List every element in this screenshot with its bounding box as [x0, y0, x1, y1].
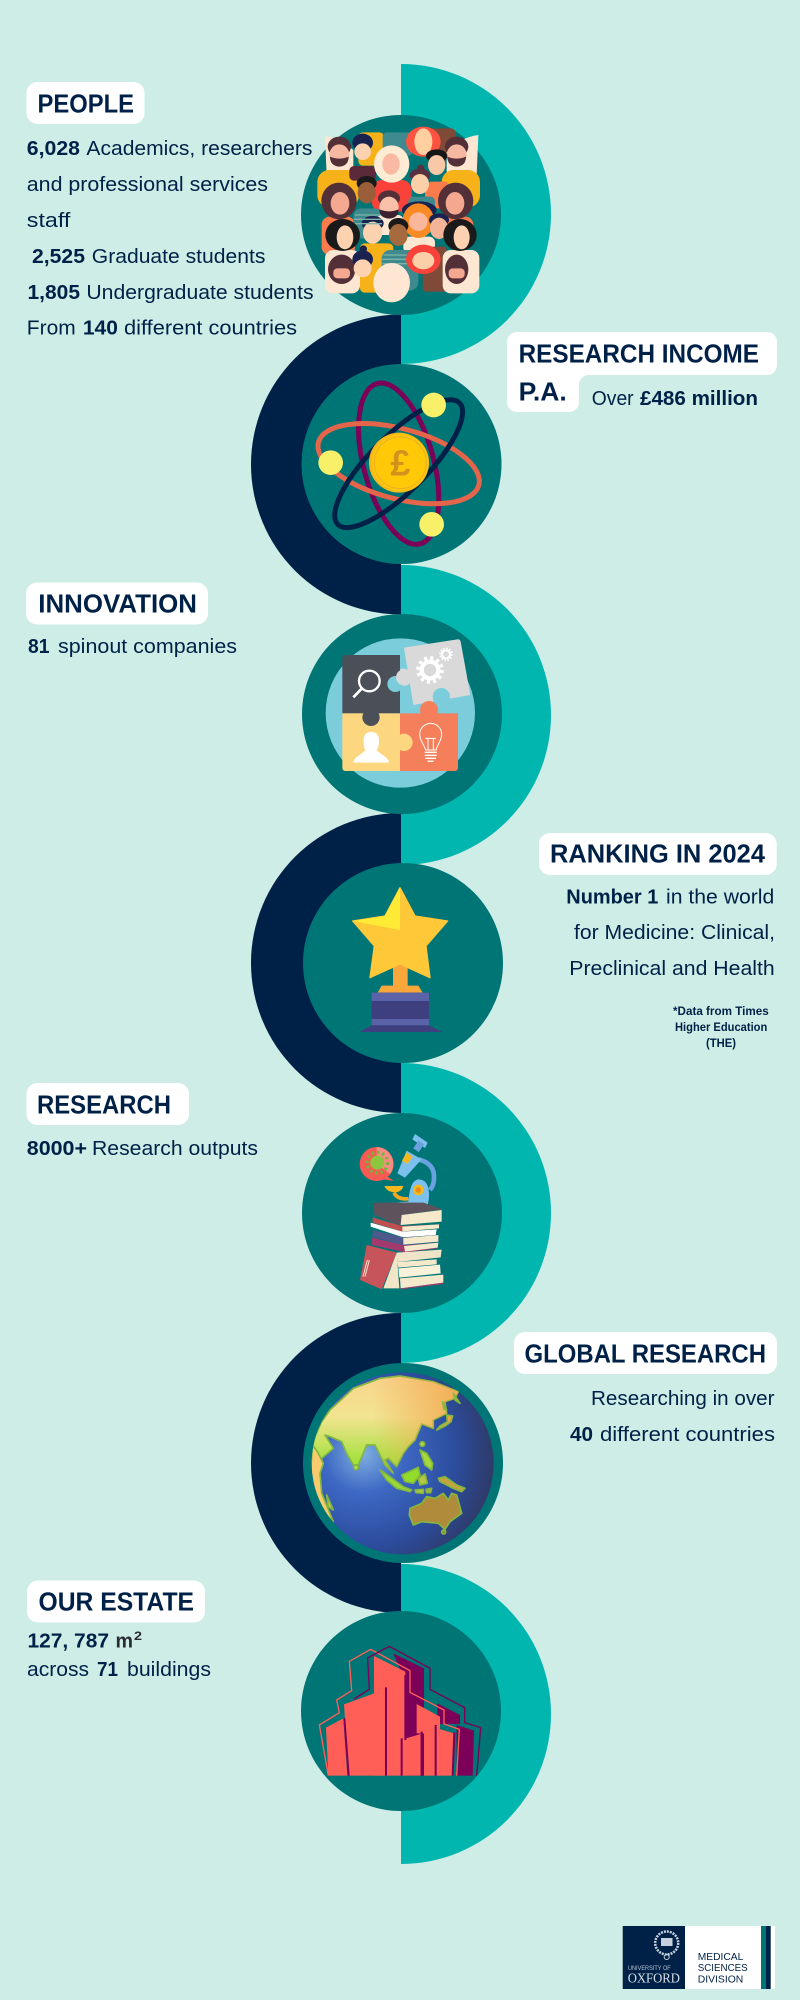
- ranking text: [566, 886, 775, 980]
- icon circle: estate: [301, 1611, 501, 1811]
- panel: people: [26, 82, 314, 340]
- icon: jigsaw puzzle: [326, 638, 475, 788]
- ranking text: Number 1: [566, 886, 658, 908]
- ranking text: for Medicine: Clinical,: [574, 922, 775, 944]
- research income value: Over: [592, 388, 634, 410]
- footnote: (THE): [706, 1038, 736, 1050]
- estate value: 2: [134, 1629, 142, 1643]
- ranking text: Preclinical and Health: [569, 958, 775, 980]
- heading: our estate: [27, 1580, 205, 1622]
- estate value: 71: [97, 1659, 118, 1681]
- icon circle: people: [301, 115, 501, 315]
- people statistics: and professional services: [27, 174, 268, 196]
- innovation value: 81: [28, 636, 50, 658]
- footnote: *Data from Times: [673, 1006, 769, 1018]
- innovation value: spinout companies: [58, 636, 237, 658]
- icon circle: innovation: [302, 614, 502, 814]
- panel: global research: [514, 1332, 777, 1446]
- estate value: 127, 787: [28, 1631, 109, 1653]
- global research value: different countries: [600, 1424, 775, 1446]
- panel: research income: [507, 332, 777, 412]
- icon circle: ranking: [303, 863, 503, 1063]
- heading: people: [26, 82, 144, 124]
- heading: ranking in 2024: RANKING IN 2024: [550, 841, 766, 869]
- heading: research income: RESEARCH INCOME: [519, 340, 759, 368]
- icon: city buildings: [319, 1646, 481, 1776]
- heading: ranking in 2024: [539, 833, 777, 875]
- icon: atom with pound coin: [309, 374, 488, 553]
- icon: atom with pound coin: £: [390, 443, 410, 484]
- heading: research: RESEARCH: [37, 1092, 171, 1120]
- panel: ranking: [539, 833, 777, 1050]
- heading: global research: [514, 1332, 777, 1374]
- heading: global research: GLOBAL RESEARCH: [524, 1340, 766, 1368]
- people statistics: Graduate students: [92, 246, 265, 268]
- icon circle: research income: [302, 364, 502, 564]
- heading: people: PEOPLE: [38, 90, 134, 118]
- logo: University of Oxford Medical Sciences Division: UNIVERSITY OF: [628, 1965, 671, 1972]
- people statistics: 2,525: [32, 246, 85, 268]
- logo: University of Oxford Medical Sciences Division: DIVISION: [698, 1973, 743, 1985]
- heading: research income: P.A.: [519, 378, 567, 406]
- heading: innovation: [26, 582, 208, 624]
- estate value: across: [27, 1659, 89, 1681]
- panel: innovation: [26, 582, 237, 658]
- research income value: £486 million: [640, 388, 758, 410]
- people statistics: Undergraduate students: [86, 282, 314, 304]
- people statistics: Academics, researchers: [86, 138, 312, 160]
- people statistics: 1,805: [28, 282, 80, 304]
- icon: books and microscope: [360, 1134, 443, 1289]
- global research value: 40: [570, 1424, 593, 1446]
- footnote: Higher Education: [675, 1022, 767, 1034]
- logo: University of Oxford Medical Sciences Division: OXFORD: [628, 1971, 680, 1986]
- ranking text: in the world: [666, 886, 774, 908]
- logo: University of Oxford Medical Sciences Division: [623, 1926, 775, 1989]
- panel: research: [26, 1083, 258, 1160]
- icon: globe: [310, 1372, 494, 1554]
- heading: research income: [507, 332, 777, 412]
- people statistics: staff: [27, 210, 71, 232]
- estate value: [27, 1629, 211, 1681]
- people statistics: 140: [83, 318, 118, 340]
- people statistics: different countries: [124, 318, 297, 340]
- estate value: m: [116, 1631, 133, 1653]
- heading: research: [26, 1083, 189, 1125]
- icon circle: global research: [303, 1363, 503, 1563]
- global research value: [570, 1388, 775, 1446]
- research income value: [592, 388, 758, 410]
- heading: innovation: INNOVATION: [38, 591, 197, 619]
- logo: University of Oxford Medical Sciences Division: SCIENCES: [698, 1962, 748, 1974]
- heading: our estate: OUR ESTATE: [38, 1589, 194, 1617]
- footnote: [673, 1006, 769, 1050]
- icon circle: research: [302, 1113, 502, 1313]
- estate value: buildings: [127, 1659, 211, 1681]
- global research value: Researching in over: [591, 1388, 775, 1410]
- icon: star trophy: [353, 888, 448, 1032]
- people statistics: From: [27, 318, 76, 340]
- spine: alternating half circles: [251, 64, 551, 1864]
- research value: Research outputs: [92, 1138, 258, 1160]
- people statistics: [27, 138, 314, 340]
- people statistics: 6,028: [27, 138, 80, 160]
- logo: University of Oxford Medical Sciences Division: MEDICAL: [698, 1951, 743, 1963]
- icon: crowd of people: [317, 127, 480, 302]
- panel: our estate: [27, 1580, 211, 1681]
- research value: 8000+: [27, 1138, 87, 1160]
- research value: [27, 1138, 258, 1160]
